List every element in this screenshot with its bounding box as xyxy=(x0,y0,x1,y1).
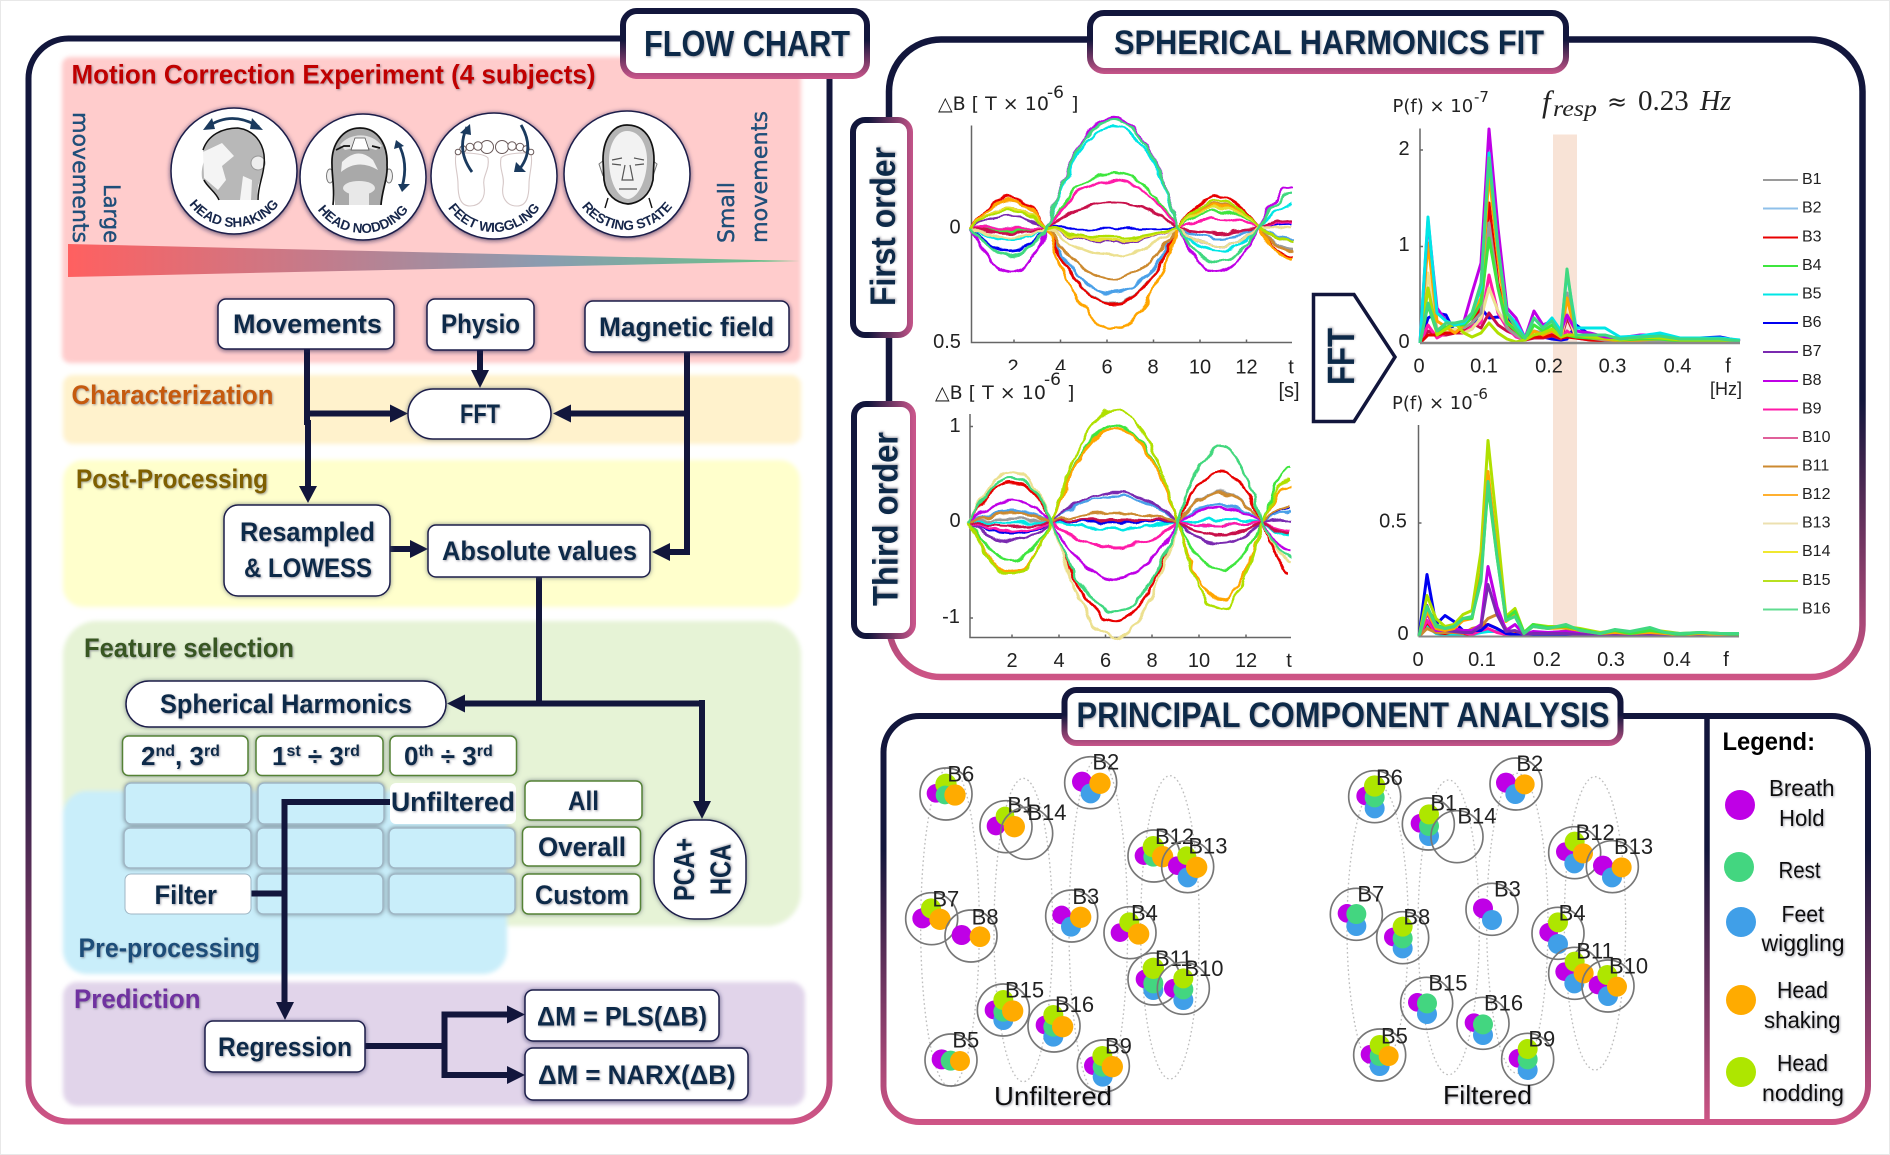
cluster B6 xyxy=(1349,765,1403,823)
label: small movements xyxy=(715,111,773,243)
chart: third order time series: 1 xyxy=(949,415,961,437)
cluster B15: B15 xyxy=(1005,977,1044,1002)
chart: first order spectrum: 0.1 xyxy=(1470,356,1498,378)
equation: respiration frequency: resp xyxy=(1553,96,1597,121)
icon: head shaking: HEAD SHAKING xyxy=(190,199,278,228)
cluster B9: B9 xyxy=(1105,1033,1132,1058)
heading: flow chart xyxy=(623,11,867,76)
chart: first order time series: 6 xyxy=(1101,356,1113,378)
header: first to third order: ÷ 3 xyxy=(301,741,344,771)
header: zero to third order xyxy=(390,736,516,776)
equation: respiration frequency: ≈ xyxy=(1607,88,1627,116)
cluster B7: B7 xyxy=(932,887,959,912)
cluster B13: B13 xyxy=(1614,834,1653,859)
cluster B4: B4 xyxy=(1131,901,1158,926)
cluster B6 xyxy=(920,762,974,820)
chart: third order time series: 0 xyxy=(949,510,961,532)
chart: first order spectrum: 0.3 xyxy=(1599,356,1626,378)
header: second and third order xyxy=(122,736,248,776)
legend: field channels: B12 xyxy=(1802,486,1831,503)
legend item: rest: Rest xyxy=(1778,857,1821,883)
cell: all xyxy=(525,781,642,820)
chart: unfiltered PCA clusters xyxy=(906,749,1227,1095)
chart: third order spectrum: 0.1 xyxy=(1468,649,1496,671)
cluster B3 xyxy=(1046,884,1099,942)
chart: third order time series: ] xyxy=(1067,382,1074,404)
chart: first order spectrum: 1 xyxy=(1398,234,1410,256)
icon: feet wiggling: FEET WIGGLING xyxy=(448,202,539,232)
chart: first order spectrum: 0.4 xyxy=(1664,356,1691,378)
equation: respiration frequency xyxy=(1542,84,1731,121)
icon: resting state: RESTING STATE xyxy=(582,201,672,230)
legend: field channels: B6 xyxy=(1802,314,1822,331)
legend item: feet wiggling: wiggling xyxy=(1761,930,1844,956)
cluster B15 xyxy=(1401,971,1467,1029)
legend: field channels: B4 xyxy=(1802,257,1822,274)
box: resampled and LOWESS: & LOWESS xyxy=(244,553,372,583)
box: PLS equation xyxy=(525,990,719,1041)
header: first to third order: st xyxy=(286,743,301,760)
cluster B9 xyxy=(1077,1033,1132,1092)
cluster B4 xyxy=(1532,901,1586,959)
cluster B2 xyxy=(1490,751,1543,810)
cluster B11 xyxy=(1128,946,1192,1005)
legend item: head nodding xyxy=(1726,1050,1844,1106)
chart: first order spectrum: 0 xyxy=(1413,356,1425,378)
cluster B4: B4 xyxy=(1559,901,1586,926)
chart: first order time series: 8 xyxy=(1147,356,1159,378)
label: large movements: movements xyxy=(67,112,92,243)
cluster B12: B12 xyxy=(1155,824,1194,849)
cell: all: All xyxy=(568,786,599,816)
icon: head nodding xyxy=(296,110,430,246)
chart: first order time series: 10 xyxy=(1189,356,1211,378)
cluster B1: B1 xyxy=(1007,793,1034,818)
box: physio: Physio xyxy=(441,309,520,339)
cluster B13: B13 xyxy=(1188,833,1227,858)
chart: first order time series: 4 xyxy=(1055,356,1066,378)
equation: respiration frequency: 0.23 xyxy=(1638,85,1689,117)
chart: third order time series: -6 xyxy=(1044,370,1061,390)
chart: first order spectrum: 0 xyxy=(1398,331,1410,353)
chart: third order time series: 4 xyxy=(1053,650,1065,672)
legend: field channels: B3 xyxy=(1802,228,1822,246)
cluster B3: B3 xyxy=(1494,877,1521,902)
chart: first order spectrum: P(f) × 10 xyxy=(1392,96,1473,117)
heading: principal component analysis: PRINCIPAL COMPONENT ANALYSIS xyxy=(1076,696,1610,735)
cluster B16 xyxy=(1457,991,1523,1049)
box: regression: Regression xyxy=(218,1032,352,1062)
chart: third order time series: 2 xyxy=(1006,650,1018,672)
cluster B13 xyxy=(1586,834,1653,893)
heading: principal component analysis xyxy=(1064,690,1620,743)
icon: feet wiggling xyxy=(427,110,562,244)
icon: head nodding: HEAD NODDING xyxy=(318,204,407,233)
cluster B8 xyxy=(1377,904,1430,964)
chart: first order time series: 12 xyxy=(1235,356,1258,378)
cell: filter xyxy=(125,874,251,914)
equation: respiration frequency: Hz xyxy=(1699,86,1731,117)
cell: filter: Filter xyxy=(154,880,217,910)
cluster B16: B16 xyxy=(1055,992,1094,1017)
box: movements: Movements xyxy=(233,309,382,339)
cluster B6: B6 xyxy=(1376,765,1403,790)
cluster B5 xyxy=(925,1027,979,1086)
chart: first order time series: -6 xyxy=(1047,83,1064,103)
box: resampled and LOWESS xyxy=(224,505,390,596)
tab: first order: First order xyxy=(864,147,903,306)
box: PCA and HCA: PCA+ xyxy=(669,838,701,901)
cluster B14: B14 xyxy=(1027,800,1066,825)
cluster B8: B8 xyxy=(972,904,999,929)
cluster B12 xyxy=(1549,820,1615,879)
legend: field channels: B16 xyxy=(1802,600,1831,618)
chart: third order spectrum xyxy=(1379,385,1739,671)
legend item: head shaking: Head xyxy=(1777,977,1828,1003)
cluster B9: B9 xyxy=(1528,1027,1555,1052)
legend: experimental conditions xyxy=(1722,728,1844,1106)
box: resampled and LOWESS: Resampled xyxy=(240,517,375,547)
header: first to third order: rd xyxy=(344,743,360,760)
arrows: flow connections xyxy=(251,349,711,1084)
chart: third order spectrum: P(f) × 10 xyxy=(1392,393,1473,414)
chart: third order spectrum: 0 xyxy=(1397,623,1409,645)
cell: overall: Overall xyxy=(538,832,626,862)
chart: third order time series xyxy=(935,370,1292,672)
panel: spherical harmonics fit xyxy=(853,13,1862,677)
cluster B11: B11 xyxy=(1576,938,1614,963)
cluster B9 xyxy=(1502,1027,1555,1085)
cluster B6: B6 xyxy=(947,762,974,787)
cluster B14 xyxy=(1431,803,1496,863)
cluster B12 xyxy=(1128,824,1194,882)
label: small movements: movements xyxy=(748,111,773,243)
cell: custom: Custom xyxy=(535,880,629,910)
panel: flow chart xyxy=(26,8,870,1124)
cluster B5: B5 xyxy=(1381,1023,1408,1048)
table: order selection xyxy=(122,736,642,1004)
legend: field channels: B15 xyxy=(1802,572,1831,589)
cluster B1: B1 xyxy=(1430,791,1457,816)
chart: first order time series: △B [ T × 10 xyxy=(938,93,1049,115)
box: NARX equation: ΔM = NARX(ΔB) xyxy=(538,1060,736,1090)
cluster B10 xyxy=(1157,956,1223,1014)
cluster B4 xyxy=(1104,901,1158,959)
cluster B11 xyxy=(1549,938,1614,999)
label: post-processing: Post-Processing xyxy=(76,464,268,494)
cluster B10: B10 xyxy=(1184,956,1223,981)
chart: third order spectrum: 0.5 xyxy=(1379,510,1407,532)
legend item: head shaking xyxy=(1726,977,1840,1033)
chart: third order time series: 6 xyxy=(1100,650,1111,672)
label: small movements: Small xyxy=(715,182,740,243)
chart: third order time series: 8 xyxy=(1146,650,1158,672)
box: physio xyxy=(427,299,534,350)
cluster B3: B3 xyxy=(1072,884,1099,909)
box: absolute values xyxy=(428,525,650,577)
stage backgrounds xyxy=(62,57,805,1106)
box: magnetic field: Magnetic field xyxy=(599,312,774,342)
legend item: feet wiggling xyxy=(1726,901,1844,956)
tab: third order: Third order xyxy=(866,432,906,606)
chart: first order time series xyxy=(933,83,1300,402)
cluster B3 xyxy=(1466,877,1521,935)
cluster B11: B11 xyxy=(1155,946,1192,971)
cluster B1 xyxy=(980,793,1034,853)
heading: flow chart: FLOW CHART xyxy=(644,23,850,64)
cluster B1 xyxy=(1402,791,1457,850)
box: FFT: FFT xyxy=(460,399,500,429)
chart: first order time series: 0 xyxy=(949,216,961,238)
box: absolute values: Absolute values xyxy=(442,536,637,566)
chart: first order spectrum: -7 xyxy=(1474,88,1489,106)
legend: field channels: B9 xyxy=(1802,400,1822,418)
legend: field channels: B14 xyxy=(1802,543,1831,560)
tab: third order xyxy=(854,404,913,636)
cluster B10: B10 xyxy=(1609,953,1648,978)
box: FFT xyxy=(408,389,551,439)
label: pre-processing: Pre-processing xyxy=(78,933,260,963)
legend item: feet wiggling: Feet xyxy=(1782,901,1825,927)
cluster B2: B2 xyxy=(1516,751,1543,776)
cluster B10 xyxy=(1582,953,1648,1012)
header: zero to third order: th xyxy=(418,743,434,760)
legend item: breath hold xyxy=(1725,775,1834,831)
heading: spherical harmonics fit xyxy=(1090,13,1566,71)
chart: third order time series: t xyxy=(1286,650,1292,672)
chart: third order time series: △B [ T × 10 xyxy=(935,382,1046,404)
divider xyxy=(1704,716,1710,1122)
legend: field channels: B7 xyxy=(1802,343,1822,360)
header: second and third order: rd xyxy=(204,743,220,760)
cluster B15 xyxy=(977,977,1044,1036)
cluster B2: B2 xyxy=(1092,749,1119,774)
legend: field channels: B1 xyxy=(1802,171,1822,188)
label: unfiltered: Unfiltered xyxy=(994,1081,1112,1111)
equation: respiration frequency: f xyxy=(1542,84,1555,119)
chart: third order time series: 10 xyxy=(1188,650,1210,672)
legend: experimental conditions: Legend: xyxy=(1722,728,1815,756)
chart: third order spectrum: 0.4 xyxy=(1663,649,1691,671)
panel: principal component analysis xyxy=(884,690,1868,1122)
box: PLS equation: ΔM = PLS(ΔB) xyxy=(537,1002,707,1032)
cluster B15: B15 xyxy=(1428,971,1467,996)
header: zero to third order: ÷ 3 xyxy=(434,741,477,771)
label: large movements: Large xyxy=(98,184,123,243)
chart: first order spectrum: 2 xyxy=(1398,138,1410,160)
chart: third order spectrum: -6 xyxy=(1473,385,1488,403)
chart: third order spectrum: 0 xyxy=(1412,649,1424,671)
chart: first order spectrum xyxy=(1392,88,1742,399)
header: first to third order: 1 xyxy=(272,741,286,771)
chart: first order time series: [s] xyxy=(1278,380,1300,402)
box: spherical harmonics: Spherical Harmonics xyxy=(160,689,412,719)
header: first to third order xyxy=(256,736,383,776)
cluster B13 xyxy=(1162,833,1227,893)
label: prediction: Prediction xyxy=(74,984,200,1014)
label: large movements xyxy=(67,112,123,243)
cluster B16: B16 xyxy=(1484,991,1523,1016)
box: PCA and HCA xyxy=(654,820,746,919)
box: movements xyxy=(218,299,394,349)
label: feature selection: Feature selection xyxy=(84,633,294,663)
legend: field channels: B8 xyxy=(1802,372,1822,389)
header: second and third order: 2 xyxy=(141,741,155,771)
legend: field channels: B11 xyxy=(1802,458,1829,474)
arrow: unfiltered and filter to regression xyxy=(251,802,390,1004)
cluster B12: B12 xyxy=(1576,820,1615,845)
cluster B14: B14 xyxy=(1457,803,1496,828)
gradient wedge: movement size xyxy=(68,244,800,277)
legend item: head nodding: Head xyxy=(1777,1050,1828,1076)
chart: first order spectrum: 0.2 xyxy=(1535,356,1563,378)
chart: first order time series: ] xyxy=(1071,93,1078,115)
legend: field channels: B13 xyxy=(1802,514,1831,532)
legend item: head nodding: nodding xyxy=(1762,1080,1844,1106)
chart: first order spectrum: [Hz] xyxy=(1710,379,1742,399)
cluster B14 xyxy=(1001,800,1066,859)
panel frame xyxy=(889,40,1862,677)
cluster B5: B5 xyxy=(952,1027,979,1052)
cluster B8: B8 xyxy=(1403,904,1430,929)
legend item: rest xyxy=(1724,852,1821,883)
chart: third order spectrum: 0.3 xyxy=(1597,649,1625,671)
cell: overall xyxy=(522,827,640,866)
cluster B2 xyxy=(1065,749,1119,809)
arrow: FFT transform: FFT xyxy=(1321,328,1363,385)
heading: experiment: Motion Correction Experiment (4 subjects) xyxy=(72,60,596,90)
header: second and third order: , 3 xyxy=(175,741,204,771)
legend: field channels: B5 xyxy=(1802,286,1822,302)
heading: spherical harmonics fit: SPHERICAL HARMONICS FIT xyxy=(1114,24,1544,62)
legend item: breath hold: Hold xyxy=(1779,805,1824,831)
chart: first order time series: t xyxy=(1288,356,1294,378)
header: zero to third order: 0 xyxy=(404,741,418,771)
chart: third order spectrum: 0.2 xyxy=(1533,649,1561,671)
cluster B8 xyxy=(945,904,999,962)
legend item: head shaking: shaking xyxy=(1764,1007,1840,1033)
cluster B7 xyxy=(906,887,959,945)
cluster B16 xyxy=(1028,992,1094,1052)
box: regression xyxy=(205,1021,365,1072)
label: filtered: Filtered xyxy=(1443,1080,1532,1110)
arrow: FFT transform xyxy=(1314,294,1395,422)
cells: preprocessing grid xyxy=(124,783,515,914)
chart: first order time series: 2 xyxy=(1007,356,1019,378)
legend item: breath hold: Breath xyxy=(1769,775,1834,801)
box: spherical harmonics xyxy=(126,681,446,727)
box: magnetic field xyxy=(585,301,789,352)
panel frame xyxy=(884,716,1868,1122)
legend: field channels xyxy=(1763,171,1831,618)
panel frame xyxy=(28,38,830,1122)
chart: third order spectrum: f xyxy=(1723,649,1729,671)
chart: third order time series: -1 xyxy=(942,606,960,628)
cluster B7 xyxy=(1330,882,1384,940)
label: characterization: Characterization xyxy=(72,380,274,410)
legend: field channels: B2 xyxy=(1802,200,1822,216)
chart: filtered PCA clusters xyxy=(1330,751,1653,1085)
header: zero to third order: rd xyxy=(477,743,493,760)
icon: head shaking xyxy=(166,104,300,240)
legend: field channels: B10 xyxy=(1802,429,1831,446)
cell: custom xyxy=(522,874,640,914)
header: second and third order: nd xyxy=(155,743,175,760)
chart: first order spectrum: f xyxy=(1725,356,1731,378)
chart: third order time series: 12 xyxy=(1235,650,1257,672)
cluster B7: B7 xyxy=(1357,882,1384,907)
icon: resting state xyxy=(560,108,694,242)
box: PCA and HCA: HCA xyxy=(706,844,738,895)
box: NARX equation xyxy=(525,1048,748,1100)
highlight band: respiration frequency xyxy=(1553,134,1577,634)
tab: first order xyxy=(853,120,910,335)
cell: unfiltered: Unfiltered xyxy=(391,787,515,817)
cluster B5 xyxy=(1354,1023,1408,1081)
chart: first order time series: 0.5 xyxy=(933,331,961,353)
